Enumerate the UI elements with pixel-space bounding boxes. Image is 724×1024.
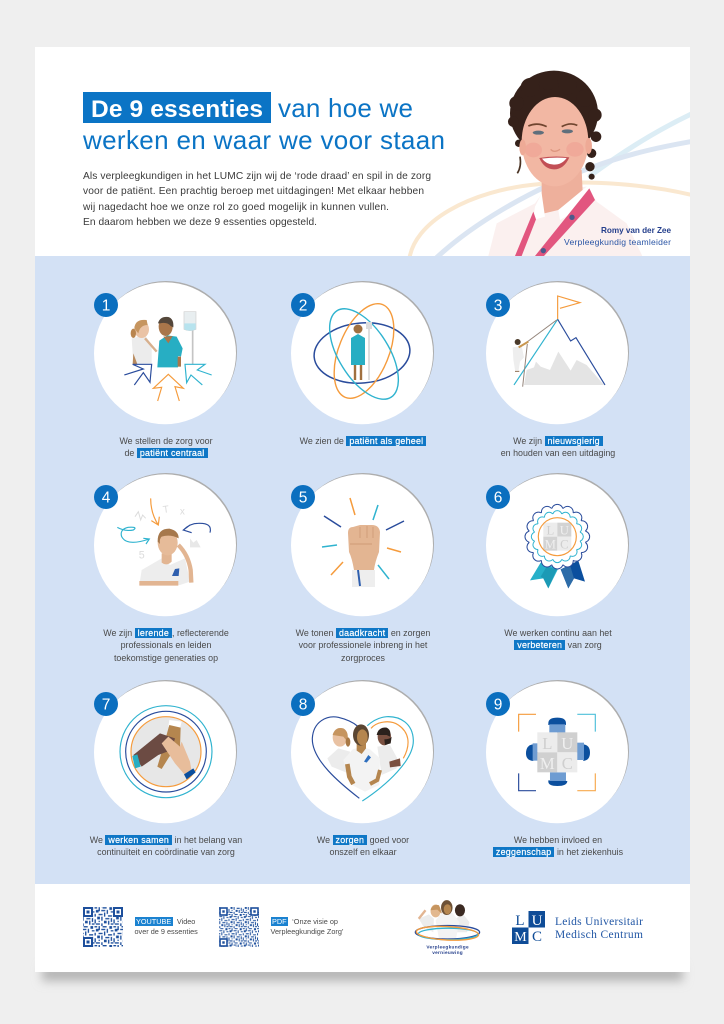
number badge 2: 2 <box>299 298 307 314</box>
footer text: PDF <box>270 917 344 936</box>
caption 7: We werken samen in het belang van <box>90 834 242 844</box>
number badge 4: 4 <box>102 490 111 506</box>
icon: rosette with LUMC seal: C <box>560 537 569 551</box>
icon: meeting table with LUMC tiles and chairs: C <box>562 754 573 773</box>
footer text: PDF: PDF ‘Onze visie op <box>272 917 338 926</box>
caption 3: We zijn nieuwsgierig <box>513 436 600 446</box>
logo: Verpleegkundige vernieuwing: vernieuwing <box>432 950 463 956</box>
footer text: PDF: Verpleegkundige Zorg’ <box>270 927 344 936</box>
logo: LUMC Leids Universitair Medisch Centrum: Leids Universitair <box>555 916 643 928</box>
caption 5: voor professionele inbreng in het <box>299 640 427 650</box>
caption 7 <box>90 834 242 857</box>
essence 5: circle <box>291 473 434 616</box>
icon: meeting table with LUMC tiles and chairs: L <box>542 734 552 753</box>
icon: three caregivers in a heart <box>312 717 413 801</box>
caption 6: verbeteren van zorg <box>517 640 602 650</box>
caption 5 <box>296 628 430 663</box>
icon: rosette with LUMC seal: M <box>545 537 556 551</box>
number badge 8: 8 <box>299 696 307 714</box>
portrait caption: Romy van der Zee <box>601 226 671 235</box>
number badge 2 <box>291 293 315 317</box>
title: De 9 essenties <box>91 96 263 123</box>
logo: LUMC Leids Universitair Medisch Centrum: U <box>532 913 543 929</box>
number badge 4 <box>94 485 118 509</box>
intro text <box>82 171 431 228</box>
icon: rosette with LUMC seal <box>525 504 590 588</box>
portrait: Romy van der Zee <box>488 71 642 256</box>
logo: LUMC Leids Universitair Medisch Centrum: M <box>514 930 527 945</box>
caption 3 <box>501 436 615 458</box>
caption 2: We zien de patiënt als geheel <box>300 436 423 446</box>
icon: climber on a mountain with flag <box>513 296 605 387</box>
title <box>82 92 445 155</box>
intro text: Als verpleegkundigen in het LUMC zijn wij de ‘rode draad’ en spil in de zorg <box>83 171 431 182</box>
logo: LUMC Leids Universitair Medisch Centrum: C <box>532 929 542 945</box>
caption 9: We hebben invloed en <box>514 834 602 844</box>
number badge 7 <box>94 692 118 716</box>
logo: Verpleegkundige vernieuwing: Verpleegkundige <box>426 944 469 950</box>
caption 3: en houden van een uitdaging <box>501 448 615 458</box>
logo: LUMC Leids Universitair Medisch Centrum <box>512 911 643 945</box>
portrait caption <box>564 226 671 247</box>
number badge 1: 1 <box>102 298 110 314</box>
caption 1: We stellen de zorg voor <box>119 436 213 446</box>
caption 4: toekomstige generaties op <box>114 653 218 663</box>
number badge 3: 3 <box>494 298 502 314</box>
number badge 6 <box>486 485 510 509</box>
caption 6: We werken continu aan het <box>504 628 612 638</box>
icon: reflecting professional with thoughts: T <box>162 504 170 516</box>
caption 7: continuïteit en coördinatie van zorg <box>97 847 235 857</box>
portrait caption: Verpleegkundig teamleider <box>564 237 671 247</box>
intro text: wij nagedacht hoe we onze rol zo goed mogelijk in kunnen vullen. <box>82 202 389 213</box>
logo: LUMC Leids Universitair Medisch Centrum: Medisch Centrum <box>555 929 643 941</box>
intro text: voor de patiënt. Een prachtig beroep met uitdagingen! Met elkaar hebben <box>83 186 424 197</box>
icon: rosette with LUMC seal: L <box>546 523 554 537</box>
icon: meeting table with LUMC tiles and chairs: M <box>540 754 555 773</box>
icon: reflecting professional with thoughts: 5 <box>139 549 145 561</box>
icon: rosette with LUMC seal: U <box>560 523 569 537</box>
caption 5: We tonen daadkracht en zorgen <box>296 628 430 638</box>
caption 6 <box>504 628 612 650</box>
essence 7: circle <box>94 680 237 823</box>
panel: essenties background <box>35 256 690 884</box>
QR code: YouTube video <box>83 907 123 947</box>
footer text: YouTube: over de 9 essenties <box>134 927 198 936</box>
logo: LUMC Leids Universitair Medisch Centrum: L <box>515 913 525 929</box>
caption 4: professionals en leiden <box>121 640 211 650</box>
caption 5: zorgproces <box>341 653 385 663</box>
caption 8: We zorgen goed voor <box>317 834 409 844</box>
essence 3: circle <box>486 281 629 424</box>
caption 9 <box>493 834 623 858</box>
number badge 9: 9 <box>494 696 502 714</box>
footer text: YouTube <box>134 917 198 936</box>
number badge 9 <box>486 692 510 716</box>
caption 4: We zijn lerende , reflecterende <box>103 628 229 638</box>
footer text: YouTube: YOUTUBE Video <box>136 917 195 926</box>
icon: nurse, patient and infusion with three arrows <box>124 312 212 401</box>
icon: meeting table with LUMC tiles and chairs <box>519 714 595 791</box>
essence 9: circle <box>486 680 629 823</box>
icon: patient encircled by orbits <box>312 295 412 410</box>
icon: reflecting professional with thoughts <box>117 498 210 585</box>
number badge 5 <box>291 485 315 509</box>
caption 9: zeggenschap in het ziekenhuis <box>496 847 623 857</box>
number badge 8 <box>291 692 315 716</box>
essence 1: circle <box>94 281 237 424</box>
number badge 7: 7 <box>102 696 110 714</box>
caption 8 <box>316 834 409 857</box>
QR code: PDF <box>219 907 259 947</box>
poster drop shadow <box>42 966 683 981</box>
icon: joined hands in rings <box>120 706 212 798</box>
caption 1: de patiënt centraal <box>124 448 205 458</box>
essence 8: circle <box>291 680 434 823</box>
caption 8: onszelf en elkaar <box>329 847 397 857</box>
title: van hoe we <box>278 93 413 123</box>
essence 2: circle <box>291 281 434 424</box>
number badge 6: 6 <box>494 490 502 506</box>
caption 4 <box>103 628 229 663</box>
essence 6: circle <box>486 473 629 616</box>
title: werken en waar we voor staan <box>82 125 445 155</box>
caption 1 <box>119 436 213 458</box>
number badge 3 <box>486 293 510 317</box>
icon: raised fist with rays <box>322 498 404 587</box>
icon: meeting table with LUMC tiles and chairs: U <box>561 734 573 753</box>
logo: Verpleegkundige vernieuwing <box>415 900 480 956</box>
icon: reflecting professional with thoughts: x <box>180 506 185 517</box>
essence 4: circle <box>94 473 237 616</box>
header background arcs <box>409 110 700 262</box>
number badge 5: 5 <box>299 490 307 506</box>
number badge 1 <box>94 293 118 317</box>
intro text: En daarom hebben we deze 9 essenties opgesteld. <box>83 217 317 228</box>
